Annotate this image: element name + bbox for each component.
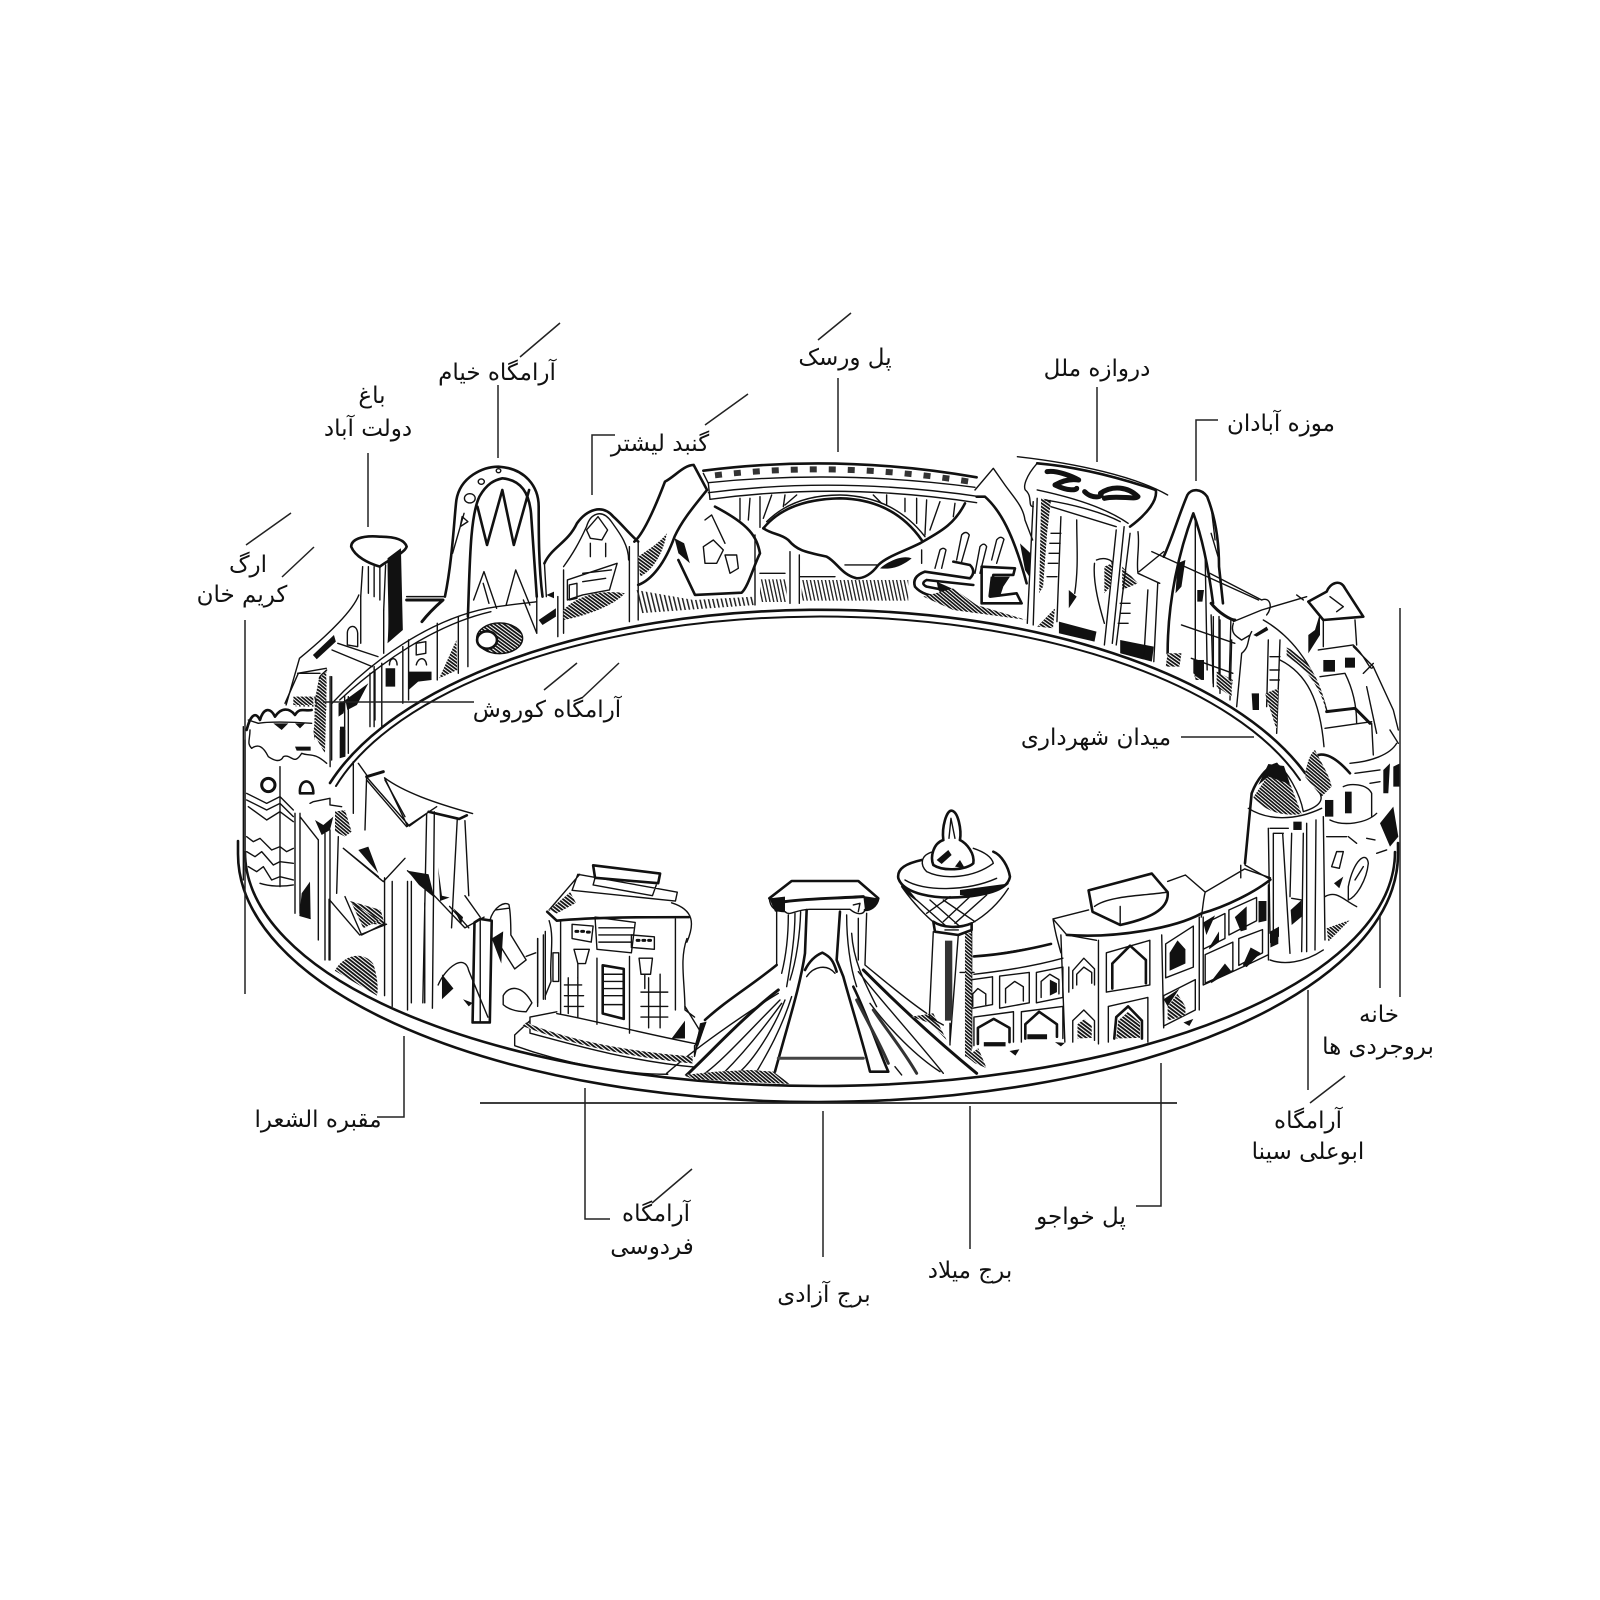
label: Cyrus tomb [323,663,623,723]
landmark: Lishtar dome and rock [539,465,755,637]
label: Abadan museum [1196,409,1335,481]
label: Lishtar dome: گنبد لیشتر [610,430,709,457]
label: Gate of Nations [1044,356,1150,462]
label: Borujerdi house: بروجردی ها [1322,1034,1434,1060]
label: Varsak bridge [798,313,892,452]
landmark: Milad tower [898,811,1030,1057]
label: Azadi tower: برج آزادی [777,1280,871,1308]
label: Tomb of the poets [254,1036,404,1133]
label: Varsak bridge: پل ورسک [798,345,892,371]
landmark: Dowlat Abad garden tower [286,536,537,767]
label: Borujerdi house [1322,608,1434,1060]
label: Abadan museum: موزه آبادان [1227,409,1335,437]
Avicenna side dome [1307,755,1350,773]
label: Bagh Dowlat Abad: دولت آباد [324,414,412,442]
label: Khayyam tomb [438,323,560,458]
label: Cyrus tomb: آرامگاه کوروش [473,695,623,723]
label: Ferdowsi tomb [585,1088,694,1260]
crown rock and fingers [678,507,760,595]
label: Khaju bridge: پل خواجو [1035,1204,1126,1230]
label: Avicenna tomb: ابوعلی سینا [1252,1139,1364,1165]
label: City Hall Square: میدان شهرداری [1021,725,1171,751]
landmark: Ferdowsi tomb [515,865,706,1074]
landmark: Tomb of the poets ruins [329,778,543,1022]
Cyrus tomb columns [348,670,375,753]
ring base and rim [238,610,1398,1102]
rim arcs and Cyrus tomb panel [332,602,537,703]
label: Bagh Dowlat Abad [324,383,412,527]
label: Karim Khan citadel: کریم خان [197,582,287,608]
label: Bagh Dowlat Abad: باغ [358,383,386,409]
baseline rule [480,1102,1177,1104]
arcade windows [1000,972,1029,1008]
label: Tomb of the poets: مقبره الشعرا [254,1107,382,1133]
label: Khaju bridge [1035,1063,1161,1230]
label: Milad tower: برج میلاد [928,1258,1012,1284]
landmark: Azadi tower [667,881,987,1084]
label: Avicenna tomb [1252,990,1364,1165]
landmark: Khaju bridge arcade [960,865,1278,1056]
landmark: Abadan museum [1164,490,1235,693]
label: Ferdowsi tomb: آرامگاه [622,1199,692,1227]
label: Karim Khan citadel: ارگ [229,551,267,578]
Avicenna tower [1245,764,1277,863]
label: Avicenna tomb: آرامگاه [1274,1106,1344,1134]
label: Karim Khan citadel [197,513,314,994]
label: Ferdowsi tomb: فردوسی [610,1234,694,1260]
label: Borujerdi house: خانه [1359,1002,1399,1028]
landmark: Karim Khan citadel [243,670,437,960]
label: Lishtar dome [592,394,748,495]
landmark: Varsak bridge [678,463,1033,620]
landmark: Gate of Nations [1017,457,1259,662]
landmark: Khayyam tomb [445,467,543,667]
label: Khayyam tomb: آرامگاه خیام [438,358,557,386]
landmark: Borujerdi house and city square [1193,573,1400,963]
label: Gate of Nations: دروازه ملل [1044,356,1150,382]
